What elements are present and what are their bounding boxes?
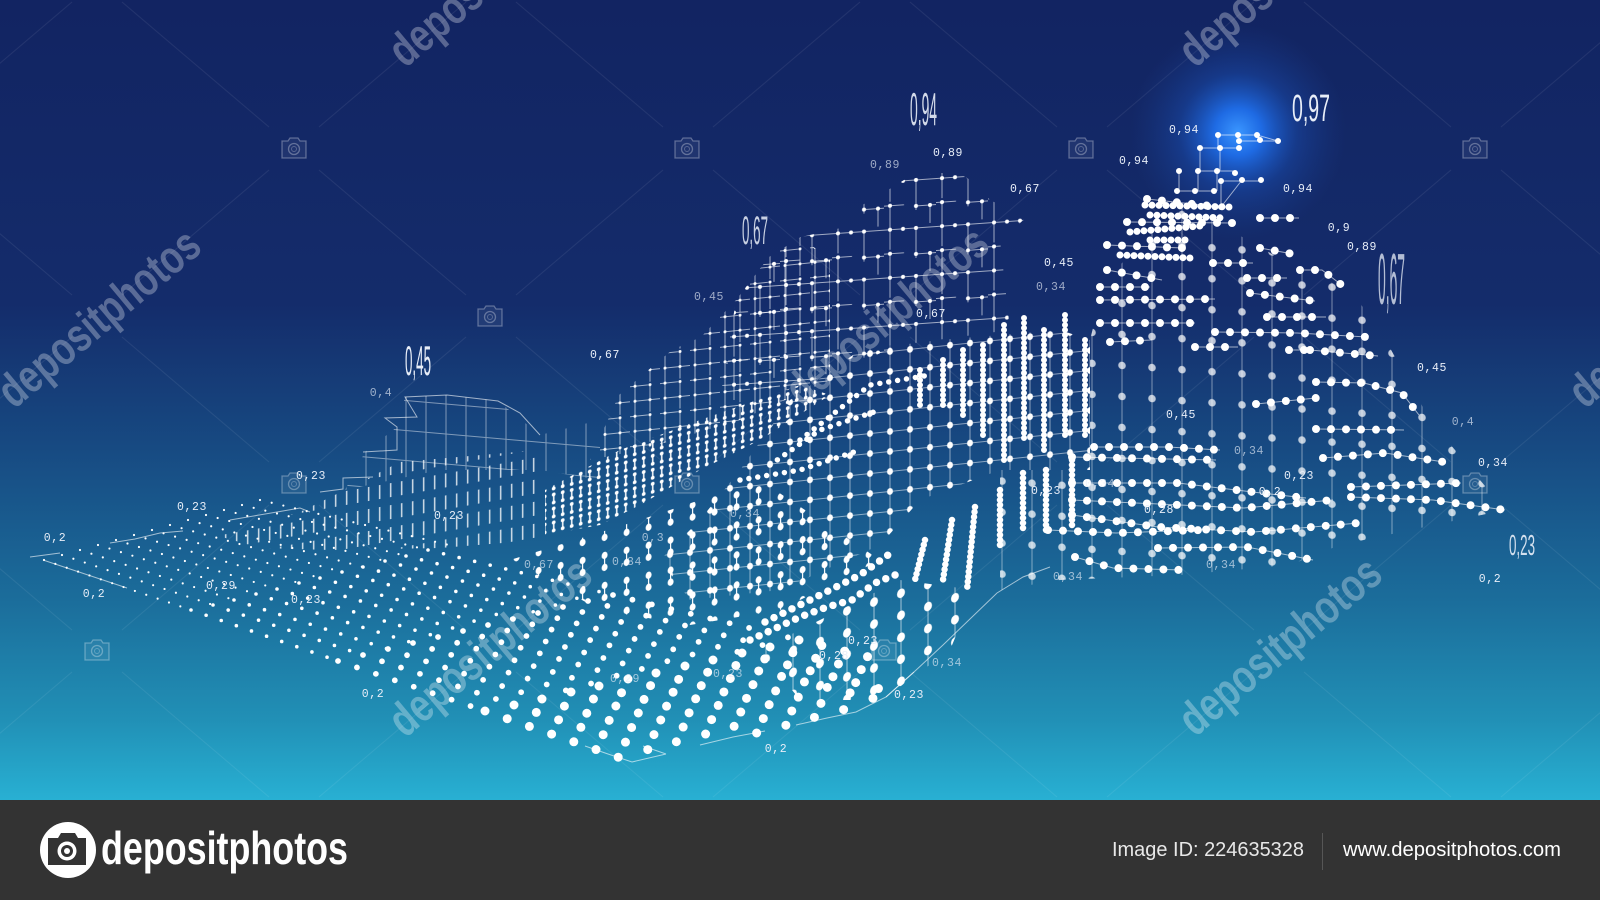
small value labels: 0,34 bbox=[1478, 457, 1508, 470]
ramp edge bbox=[886, 567, 1050, 697]
small value labels: 0,4 bbox=[370, 387, 392, 400]
peak glow bbox=[1130, 24, 1346, 240]
small value labels: 0,34 bbox=[1053, 571, 1083, 584]
flat dot rows, front bbox=[485, 640, 884, 762]
bright pillars band bbox=[545, 385, 830, 535]
small value labels: 0,3 bbox=[642, 532, 664, 545]
small value labels: 0,2 bbox=[1479, 573, 1501, 586]
small value labels: 0,2 bbox=[83, 588, 105, 601]
small value labels: 0,23 bbox=[291, 594, 321, 607]
small value labels: 0,45 bbox=[1166, 409, 1196, 422]
small value labels: 0,23 bbox=[713, 668, 743, 681]
large value labels: 0,67 bbox=[742, 209, 768, 253]
small value labels: 0,23 bbox=[848, 635, 878, 648]
footer bar bbox=[0, 800, 1600, 900]
small value labels: 0,34 bbox=[932, 657, 962, 670]
large value labels bbox=[405, 83, 1535, 562]
wall columns lower bbox=[915, 460, 1072, 590]
flat dot rows, large bbox=[338, 595, 799, 711]
summit nodes bbox=[1177, 135, 1278, 207]
text: 0,23 bbox=[1509, 530, 1535, 562]
small value labels: 0,28 bbox=[1144, 504, 1174, 517]
right rows links bbox=[1048, 199, 1505, 570]
small value labels: 0,29 bbox=[206, 580, 236, 593]
large value labels: 0,94 bbox=[910, 83, 937, 135]
small value labels: 0,89 bbox=[933, 147, 963, 160]
website: www.depositphotos.com bbox=[1342, 839, 1561, 861]
small value labels bbox=[44, 124, 1508, 756]
small value labels: 0,34 bbox=[1036, 281, 1066, 294]
ramp field bbox=[760, 580, 975, 700]
diagonal watermarks: depositphotos bbox=[774, 215, 998, 415]
small value labels: 0,4 bbox=[1452, 416, 1474, 429]
small value labels: 0,23 bbox=[434, 510, 464, 523]
small value labels: 0,89 bbox=[1347, 241, 1377, 254]
small value labels: 0,2 bbox=[362, 688, 384, 701]
summit blob bbox=[1120, 205, 1230, 258]
flat dot rows, small bbox=[44, 500, 449, 610]
small value labels: 0,67 bbox=[590, 349, 620, 362]
watermark camera icons bbox=[85, 138, 1487, 660]
small value labels: 0,23 bbox=[1031, 485, 1061, 498]
stepped wire silhouette on left bbox=[30, 395, 540, 588]
wall columns upper bbox=[920, 315, 1085, 464]
wire panel behind left hump bbox=[345, 395, 600, 490]
small value labels: 0,23 bbox=[1284, 470, 1314, 483]
diagonal watermarks: depositphotos bbox=[377, 546, 601, 746]
bright mid band dots bbox=[740, 375, 930, 480]
small value labels: 0,94 bbox=[1283, 183, 1313, 196]
small value labels: 0,34 bbox=[612, 556, 642, 569]
small value labels: 0,2 bbox=[44, 532, 66, 545]
large value labels: 0,67 bbox=[1378, 240, 1405, 320]
small value labels: 0,94 bbox=[1169, 124, 1199, 137]
right rows dots bbox=[1048, 199, 1505, 570]
logo wordmark: depositphotos bbox=[101, 822, 348, 874]
flat dot rows, medium bbox=[191, 550, 613, 661]
front edge links bbox=[585, 672, 914, 762]
small value labels: 0,45 bbox=[694, 291, 724, 304]
small value labels: 0,2 bbox=[765, 743, 787, 756]
medium node field bbox=[660, 330, 1090, 600]
right field bbox=[1000, 205, 1505, 590]
large value labels: 0,97 bbox=[1292, 88, 1330, 130]
image id: Image ID: 224635328 bbox=[1112, 839, 1304, 861]
small value labels: 0,34 bbox=[1234, 445, 1264, 458]
small value labels: 0,67 bbox=[1010, 183, 1040, 196]
small value labels: 0,45 bbox=[1044, 257, 1074, 270]
small value labels: 0,34 bbox=[730, 508, 760, 521]
small value labels: 0,2 bbox=[1259, 486, 1281, 499]
small value labels: 0,67 bbox=[524, 559, 554, 572]
thin pillars left bbox=[215, 450, 540, 550]
icon: camera logo bbox=[40, 822, 96, 878]
crest band bbox=[750, 550, 900, 640]
summit links bbox=[1177, 135, 1278, 207]
large value labels: 0,45 bbox=[405, 337, 431, 384]
small value labels: 0,34 bbox=[1206, 559, 1236, 572]
small value labels: 0,94 bbox=[1119, 155, 1149, 168]
small value labels: 0,29 bbox=[610, 673, 640, 686]
small value labels: 0,89 bbox=[870, 159, 900, 172]
small value labels: 0,9 bbox=[1328, 222, 1350, 235]
upper sparse grid bbox=[720, 173, 1026, 400]
small value labels: 0,23 bbox=[894, 689, 924, 702]
small value labels: 0,28 bbox=[819, 650, 849, 663]
small value labels: 0,23 bbox=[296, 470, 326, 483]
small value labels: 0,67 bbox=[916, 308, 946, 321]
mid pill pillars bbox=[510, 480, 880, 625]
data surface mesh bbox=[30, 135, 1505, 762]
small value labels: 0,45 bbox=[1417, 362, 1447, 375]
small value labels: 0,23 bbox=[177, 501, 207, 514]
small value labels: 0,34 bbox=[1085, 478, 1115, 491]
diagonal watermarks: depositphotos bbox=[1167, 545, 1391, 745]
fine grid left of summit bbox=[590, 237, 830, 460]
separator bbox=[1322, 833, 1323, 870]
